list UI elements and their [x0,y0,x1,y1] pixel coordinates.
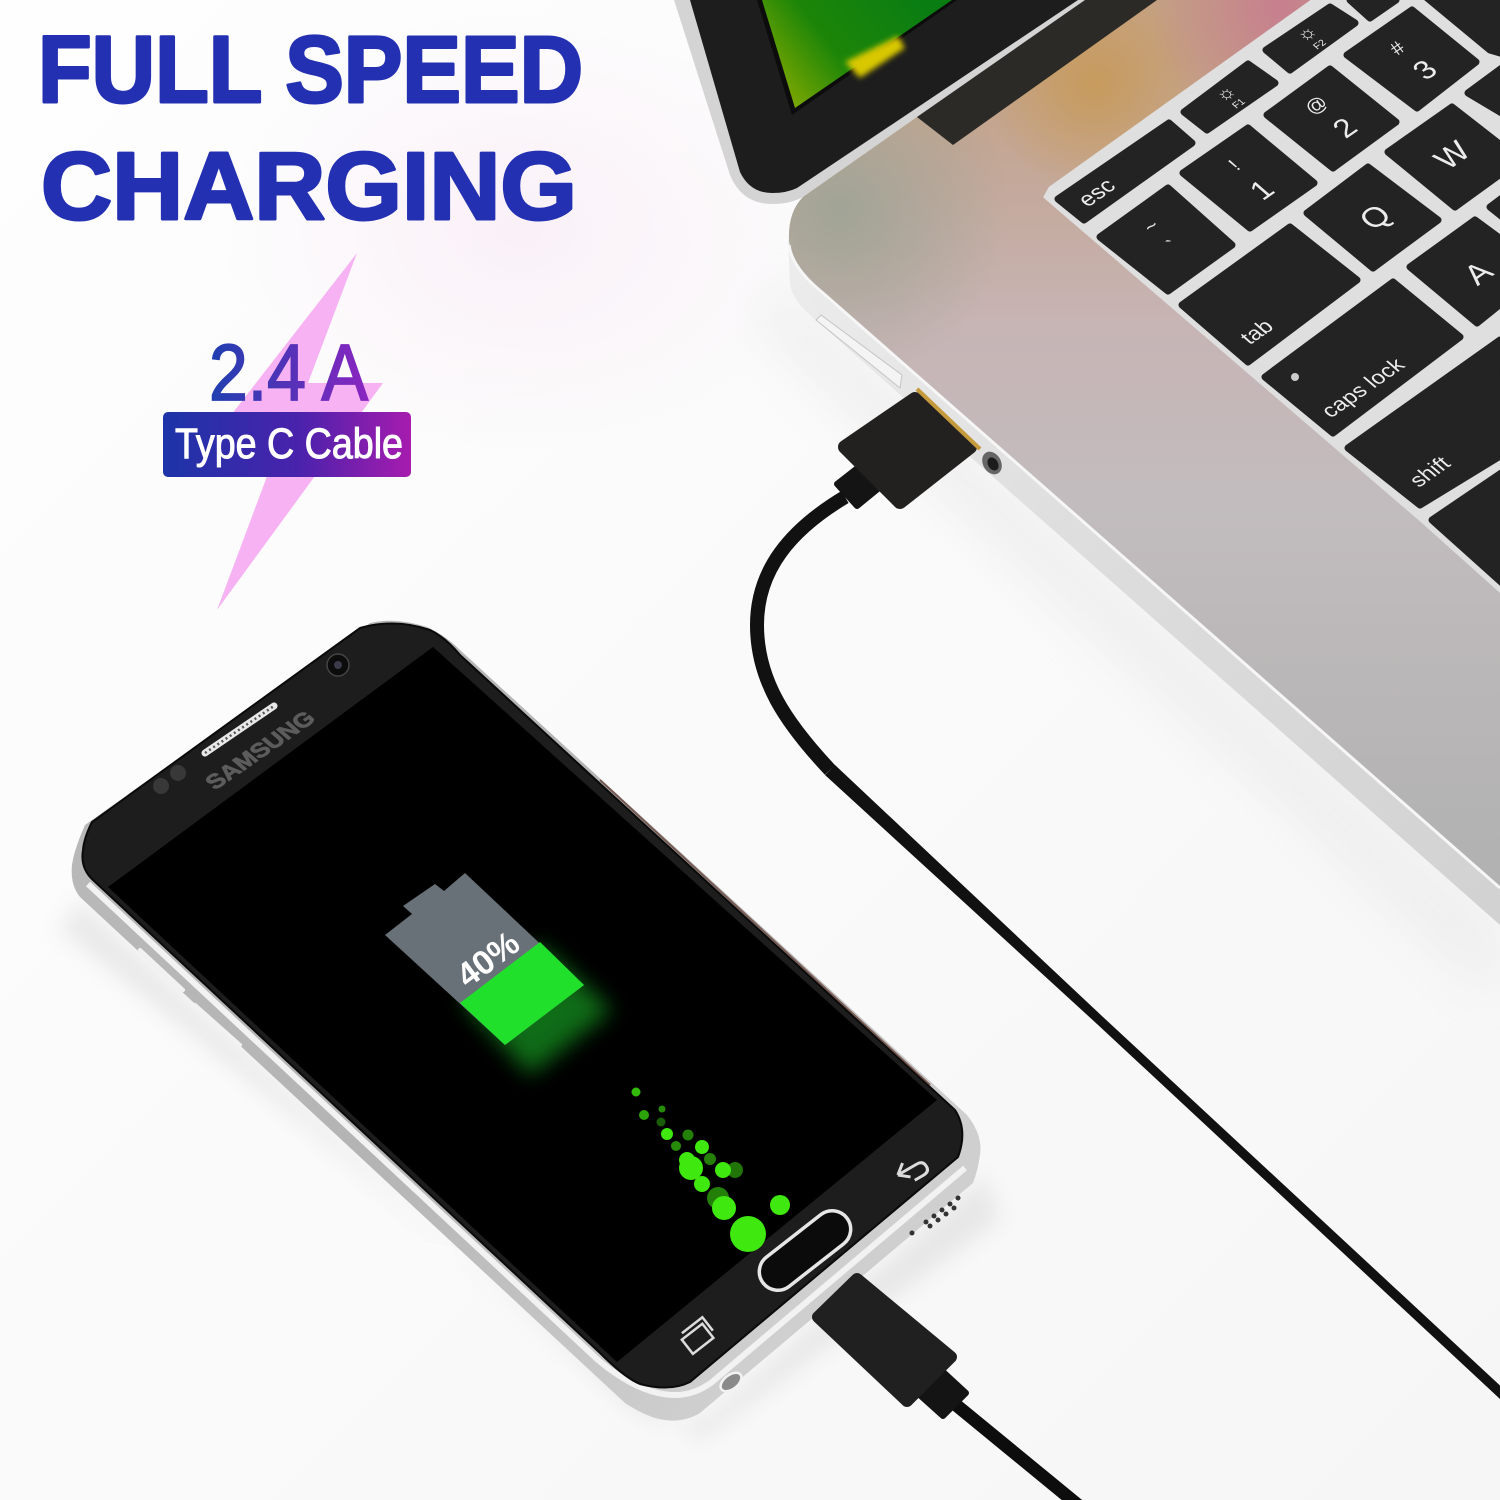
laptop screen lid [674,0,1090,204]
title: CHARGING [41,133,577,240]
phone [72,621,980,1421]
key labels: ! [1224,157,1245,174]
phone shadow [60,900,1000,1440]
phone body [72,621,980,1421]
battery glow [462,945,612,1075]
audio jack [978,448,1006,478]
gold connector band [917,389,980,449]
keyboard tray [1045,0,1500,600]
battery charge level [460,942,584,1045]
phone face [82,623,962,1388]
front camera [327,654,349,676]
key labels: tab [1235,315,1279,349]
key labels: esc [1072,174,1121,211]
key labels: Q [1351,198,1399,236]
key labels: caps lock [1316,353,1410,422]
key labels: ☼ [1210,81,1242,106]
sensors [153,765,186,794]
title [38,17,583,240]
brand logo: SAMSUNG [199,706,321,794]
key labels: ` [1163,237,1185,255]
laptop side edge [788,240,1500,925]
earpiece [205,706,274,753]
key labels: F2 [1311,38,1329,52]
cable upper curve [757,497,845,770]
key labels: 2 [1326,113,1365,144]
USB-A collar [837,466,879,506]
cable type badge: Type C Cable [175,420,403,468]
recents icon [679,1317,717,1354]
amperage label: 2.4 A [209,328,369,417]
key labels: shift [1404,452,1456,491]
SD card slot [816,315,902,388]
title: FULL SPEED [38,17,583,123]
key labels: ~ [1139,216,1165,237]
battery percent: 40% [450,924,527,995]
key labels [1072,21,1500,491]
laptop deck [789,0,1500,888]
USB-C cable tail [950,1400,1078,1500]
speaker grille [910,1196,960,1236]
charging bubbles [632,1088,790,1252]
key labels: 1 [1243,175,1282,206]
USB-C plug body [818,1279,951,1401]
cable lower run, tapering [825,765,1500,1399]
lightning bolt with 2.4 A Type C Cable badge [163,253,411,610]
key labels: @ [1300,93,1333,119]
battery shell [385,873,584,1045]
USB-A plug [845,399,970,502]
cable type badge [163,412,411,477]
phone screen [108,647,937,1362]
headphone jack [717,1369,745,1395]
USB cable [757,389,1500,1399]
home button [752,1203,858,1298]
key labels: W [1426,135,1478,175]
key labels: A [1456,255,1500,291]
key labels: 3 [1406,55,1445,86]
keys [1058,0,1500,590]
laptop [674,0,1500,925]
hinge strip [917,0,1157,145]
phone lower edge highlight [88,884,965,1395]
USB-C plug and cable [818,1279,1078,1500]
side buttons [140,950,240,1045]
key labels: ☼ [1291,21,1323,46]
key labels: # [1385,38,1411,59]
phone right rim tint [600,780,930,1085]
battery [385,873,612,1075]
key labels: F1 [1230,97,1248,111]
USB-C collar [914,1369,966,1416]
icon: lightning bolt [200,253,383,610]
back icon [894,1154,929,1186]
